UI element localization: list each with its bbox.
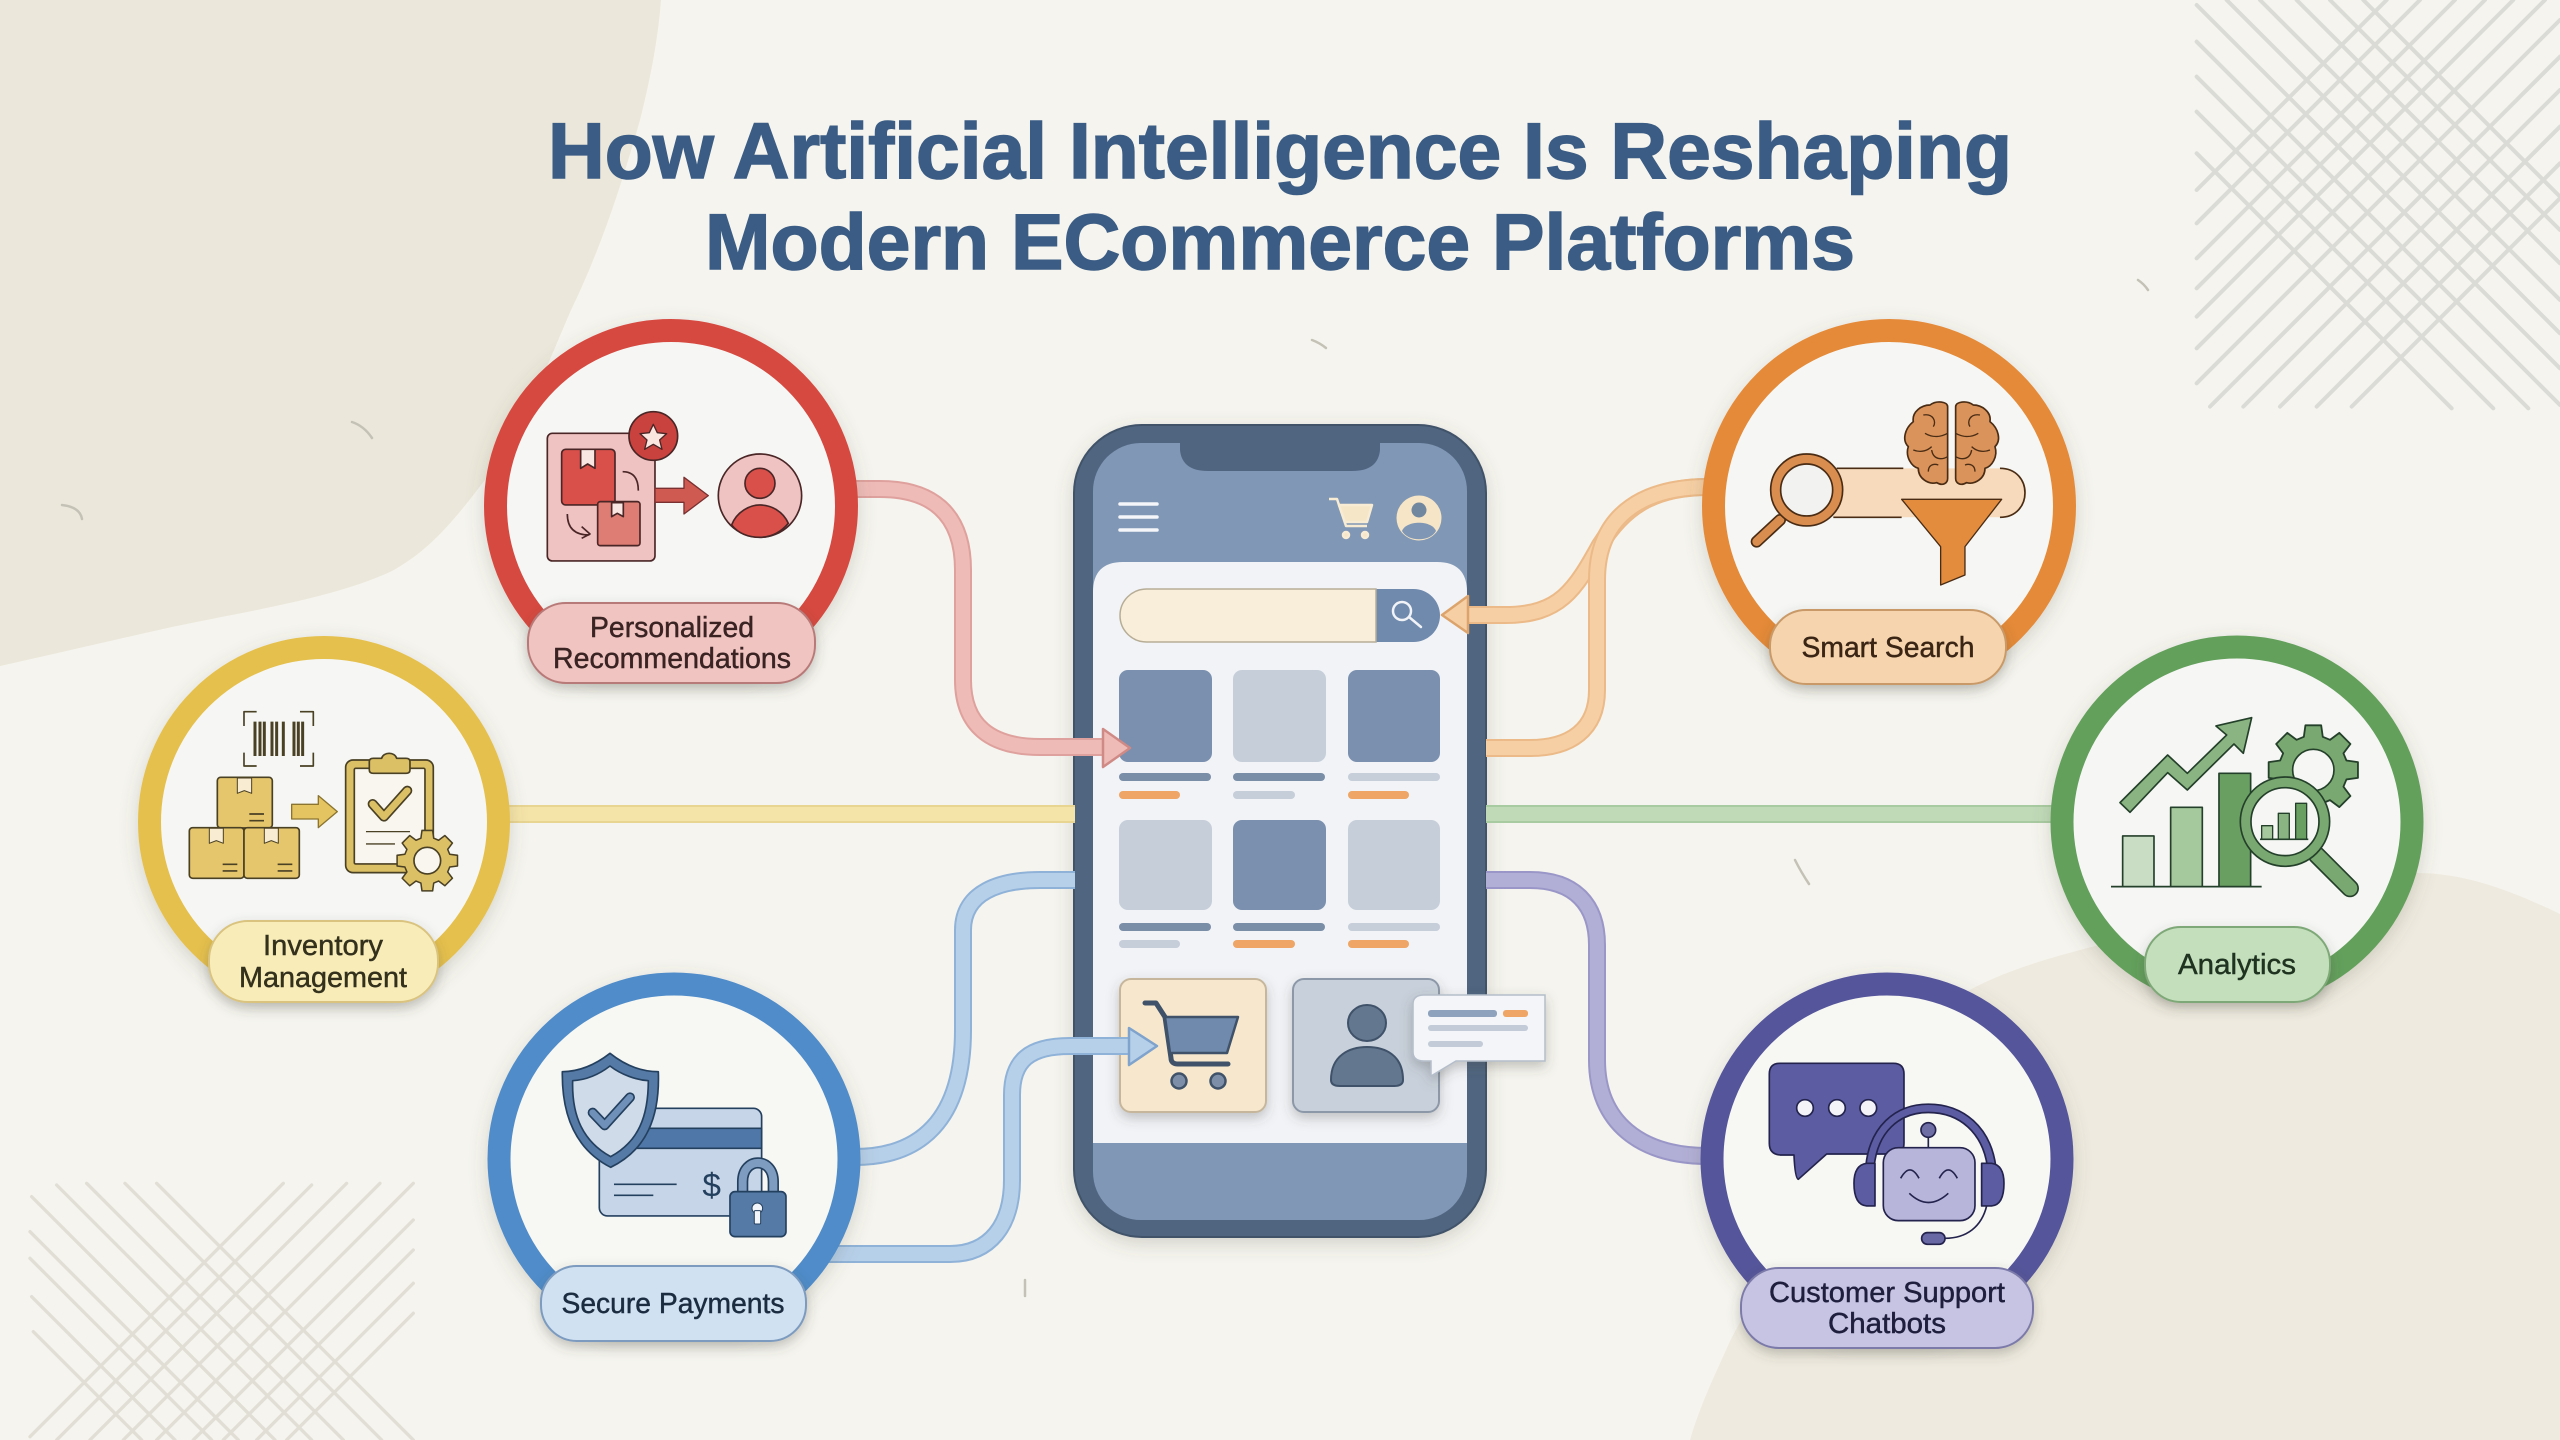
node: customer support chatbots bbox=[1712, 984, 2062, 1348]
node: smart search bbox=[1714, 330, 2064, 684]
title: How Artificial Intelligence Is Reshaping bbox=[548, 106, 2012, 195]
label pill bbox=[1770, 610, 2006, 684]
label pill: Management bbox=[239, 962, 407, 994]
phone frame bbox=[1074, 425, 1486, 1237]
label pill bbox=[209, 921, 438, 1002]
connector: smart search lower branch bbox=[1486, 487, 1708, 748]
arrowhead: orange bbox=[1442, 596, 1468, 633]
label pill: Recommendations bbox=[553, 643, 791, 675]
connector: secure payments upper branch bbox=[855, 880, 1075, 1157]
arrowhead: red bbox=[1103, 729, 1130, 767]
node: inventory management bbox=[150, 648, 498, 1002]
label pill bbox=[528, 603, 815, 683]
product text bars row 1 bbox=[1119, 773, 1440, 799]
connector: analytics to phone bbox=[1486, 805, 2056, 823]
decorative paper specks bbox=[62, 280, 2148, 1296]
background blob: top left bbox=[0, 0, 661, 666]
node: analytics bbox=[2062, 647, 2412, 1002]
label pill bbox=[1741, 1268, 2033, 1348]
decorative hatch: bottom left bbox=[30, 1183, 413, 1440]
user card bbox=[1293, 979, 1439, 1112]
icon: analytics bbox=[2111, 718, 2358, 888]
ring bbox=[2062, 647, 2412, 997]
label pill: Inventory bbox=[263, 930, 384, 962]
icon: inventory bbox=[189, 712, 458, 891]
search bar bbox=[1120, 589, 1440, 642]
cart card bbox=[1120, 979, 1266, 1112]
ring bbox=[496, 330, 846, 682]
background blob: bottom right bbox=[1690, 873, 2560, 1440]
title: Modern ECommerce Platforms bbox=[705, 197, 1855, 286]
label pill: Chatbots bbox=[1828, 1308, 1946, 1340]
chat bubble bbox=[1413, 995, 1545, 1076]
app content panel bbox=[1093, 562, 1467, 1143]
node: secure payments bbox=[499, 984, 849, 1341]
node: personalized recommendations bbox=[496, 330, 846, 683]
product tile row 1 bbox=[1119, 670, 1440, 762]
arrowhead: blue bbox=[1129, 1028, 1157, 1065]
label pill: Analytics bbox=[2178, 949, 2296, 981]
icon: search brain funnel bbox=[1757, 402, 2026, 585]
decorative hatch: top right bbox=[2197, 0, 2560, 408]
ring bbox=[1714, 330, 2064, 682]
product text bars row 2 bbox=[1119, 923, 1440, 948]
header cart icon bbox=[1329, 499, 1372, 538]
label pill bbox=[541, 1266, 806, 1341]
label pill: Smart Search bbox=[1802, 632, 1974, 664]
icon: products to user bbox=[547, 412, 802, 561]
icon: chatbot bbox=[1769, 1063, 2004, 1244]
header avatar icon bbox=[1396, 496, 1442, 540]
phone notch bbox=[1180, 443, 1380, 471]
connector: personalized recommendations to product tile bbox=[850, 489, 1130, 767]
ring bbox=[499, 984, 849, 1334]
ring bbox=[1712, 984, 2062, 1334]
label pill: Customer Support bbox=[1769, 1277, 2005, 1309]
label pill bbox=[2145, 927, 2330, 1002]
ring bbox=[150, 648, 498, 996]
phone mockup bbox=[1074, 425, 1545, 1237]
connector: inventory management to phone bbox=[500, 805, 1075, 823]
label pill: Personalized bbox=[590, 612, 754, 644]
title bbox=[548, 106, 2012, 286]
icon: shield card lock bbox=[562, 1053, 786, 1237]
product tile row 2 bbox=[1119, 820, 1440, 910]
phone screen bbox=[1093, 443, 1467, 1220]
label pill: Secure Payments bbox=[562, 1288, 784, 1320]
connector: smart search to search bar bbox=[1442, 487, 1708, 633]
connector: secure payments to cart card bbox=[826, 1028, 1157, 1254]
product grid bbox=[1119, 670, 1440, 948]
hamburger menu icon bbox=[1120, 504, 1157, 530]
icon: shield card lock: $ bbox=[702, 1168, 721, 1205]
connector: customer support chatbots bbox=[1486, 880, 1708, 1156]
